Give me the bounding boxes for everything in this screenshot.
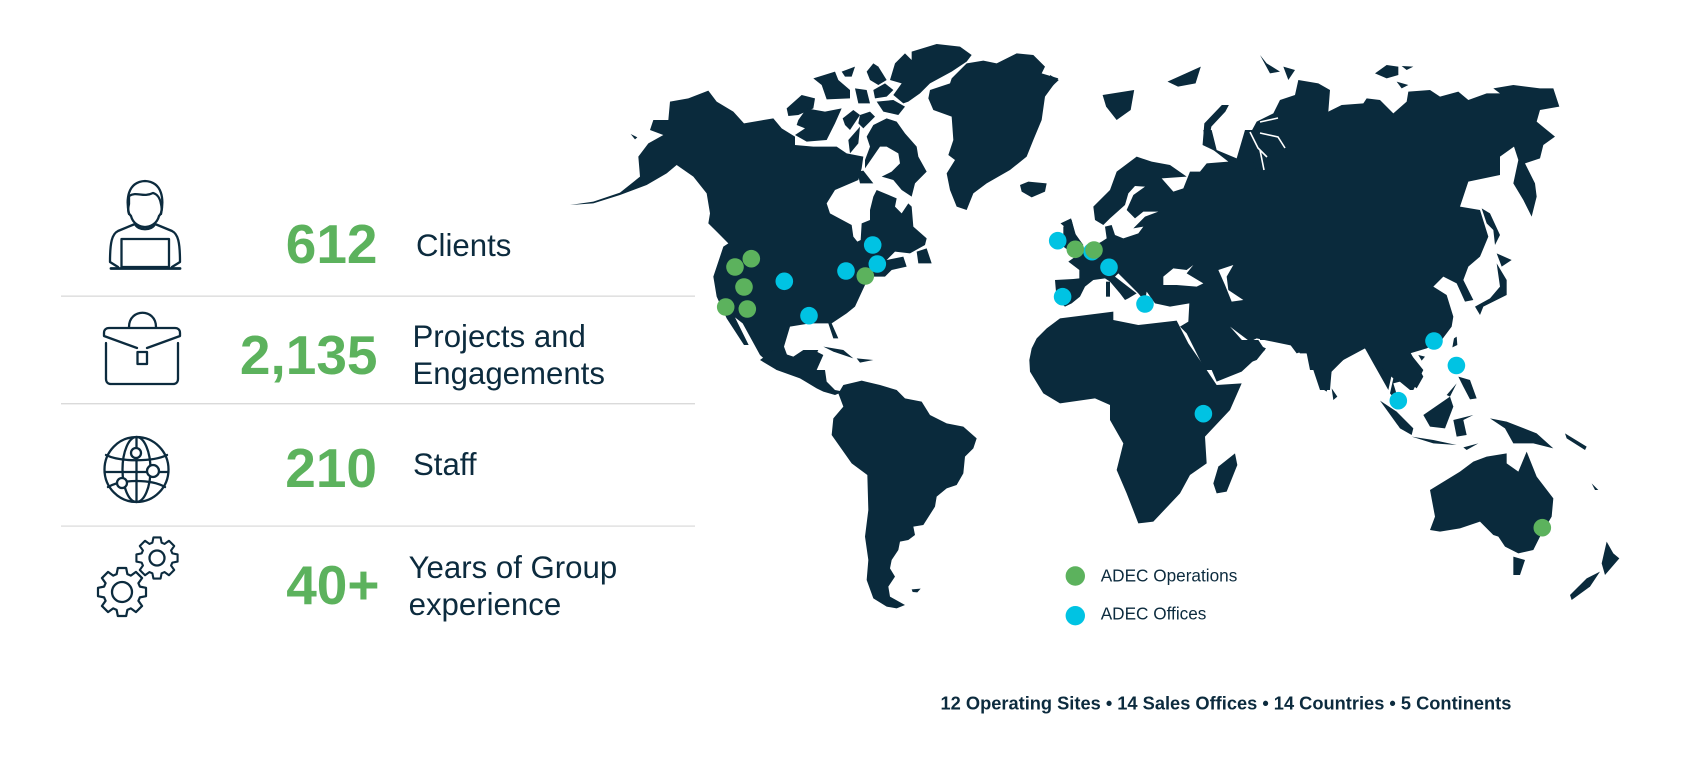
legend: ADEC Operations: ADEC Operations bbox=[1101, 566, 1237, 586]
label: Years of Group bbox=[409, 550, 617, 585]
world map bbox=[570, 44, 1619, 608]
divider bbox=[61, 526, 695, 527]
map: Arctic Russia islands bbox=[1050, 67, 1229, 237]
row: years of experience: 40+ bbox=[286, 554, 380, 616]
row: projects and engagements: 2,135 bbox=[240, 324, 378, 386]
map: Arctic river inlets bbox=[1250, 118, 1285, 170]
row: staff: Staff bbox=[413, 447, 477, 482]
legend bbox=[1066, 566, 1237, 625]
label: Projects and bbox=[412, 319, 586, 354]
row: projects and engagements bbox=[104, 313, 605, 391]
row: clients bbox=[110, 181, 511, 275]
row: years of experience bbox=[98, 537, 617, 622]
map markers: ADEC Offices bbox=[776, 232, 1465, 423]
map: Northern and Eastern Asia bbox=[1247, 55, 1559, 390]
row: staff: 210 bbox=[285, 437, 377, 499]
row: years of experience: experience bbox=[409, 587, 561, 622]
footer summary: 12 Operating Sites • 14 Sales Offices • 14 Countries • 5 Continents bbox=[940, 692, 1511, 714]
row: clients: Clients bbox=[416, 228, 511, 263]
map: seas (Black Sea and Caspian) bbox=[1163, 265, 1243, 302]
divider bbox=[61, 403, 695, 404]
legend: ADEC Offices bbox=[1066, 603, 1206, 625]
legend: ADEC Offices: ADEC Offices bbox=[1101, 603, 1206, 623]
icon: gears bbox=[98, 537, 178, 616]
map marker: office overlapping operations site bbox=[868, 255, 886, 273]
icon: person with laptop bbox=[110, 181, 180, 268]
row: projects and engagements: Engagements bbox=[412, 356, 605, 391]
divider bbox=[61, 296, 695, 297]
row: staff bbox=[104, 437, 477, 502]
map: North America mainland bbox=[570, 91, 927, 370]
map markers: ADEC Operations bbox=[717, 240, 1551, 536]
map: Central and South America, Africa bbox=[760, 312, 1242, 608]
icon: connected globe bbox=[104, 437, 168, 502]
icon: briefcase bbox=[104, 313, 180, 384]
map: Arctic Canada, Greenland and Iceland bbox=[787, 44, 1058, 263]
map: South Asia, Southeast Asia and Oceania bbox=[1202, 340, 1619, 600]
row: clients: 612 bbox=[286, 213, 378, 275]
stats panel bbox=[61, 181, 695, 622]
map: Europe and Western Asia bbox=[1055, 130, 1330, 370]
